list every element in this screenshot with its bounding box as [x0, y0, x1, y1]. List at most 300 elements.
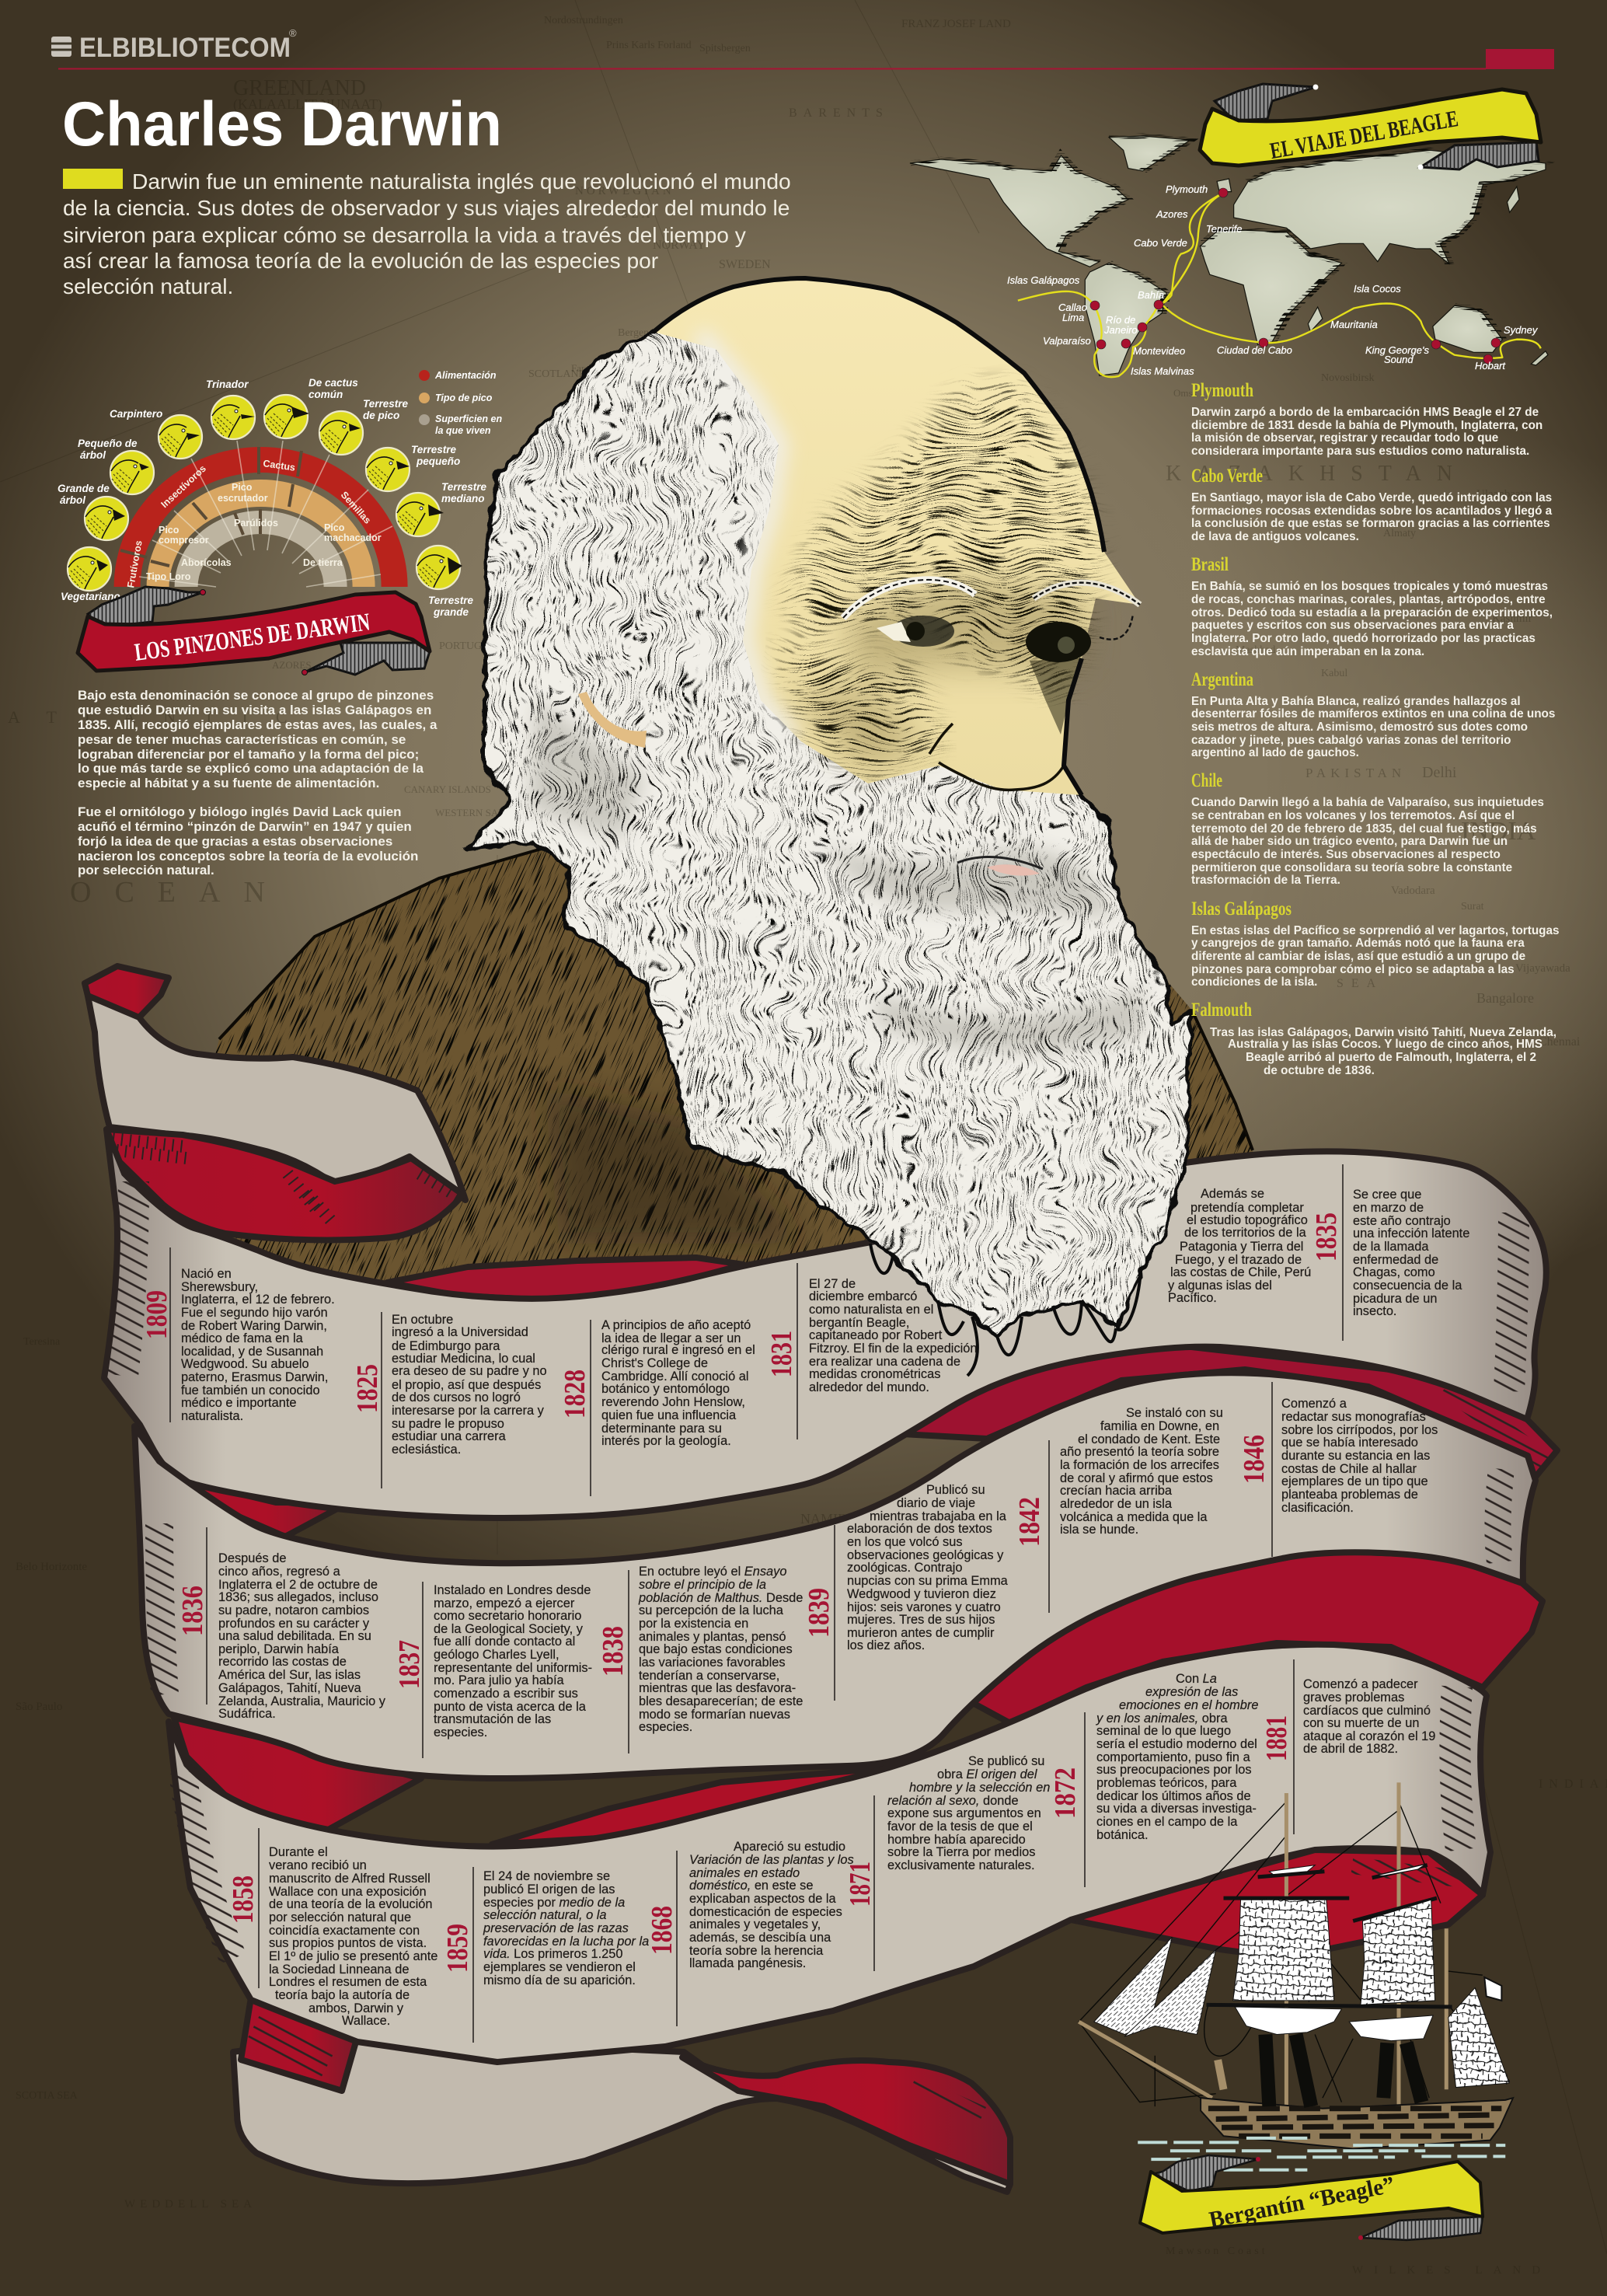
stage: Plymouth	[1191, 380, 1543, 458]
timeline entry 1837: transmutación de las	[434, 1712, 551, 1726]
background: world map sepia texture: SCOTLAND	[528, 368, 587, 380]
timeline entry 1828: botánico y entomólogo	[601, 1382, 730, 1396]
background: world map sepia texture: Chennai	[1539, 1035, 1581, 1049]
timeline entry 1837: de la Geological Society, y	[434, 1622, 584, 1636]
background: world map sepia texture: Omsk	[1173, 387, 1198, 399]
timeline entry 1868: 1868	[646, 1906, 678, 1955]
map place labels: Cabo Verde	[1134, 237, 1187, 249]
background: world map sepia texture: Prins Karls Forland	[606, 40, 692, 51]
timeline entry 1881: graves problemas	[1303, 1691, 1404, 1705]
timeline entry 1836: profundos en su carácter y	[218, 1617, 370, 1631]
chart legend: Superficien en	[435, 413, 502, 424]
timeline entry 1836: Sudáfrica.	[218, 1707, 276, 1721]
text block: Darwin's finches description: Bajo esta denominación se conoce al grupo de pinzones	[78, 688, 434, 703]
timeline entry 1835: este año contrajo	[1353, 1214, 1451, 1228]
timeline entry 1831: Además se	[1201, 1187, 1264, 1201]
background: world map sepia texture: SEA	[622, 208, 653, 221]
timeline entry 1859: publicó El origen de las	[483, 1883, 615, 1896]
timeline entry 1839: los diez años.	[847, 1638, 925, 1652]
background: world map sepia texture: Vadodara	[1391, 885, 1435, 897]
timeline entry 1837: fue allí donde contacto al	[434, 1635, 575, 1649]
timeline entry 1809: Nació en	[181, 1267, 232, 1281]
timeline entry 1838: su percepción de la lucha	[639, 1603, 784, 1617]
timeline entry 1825: el propio, así que después	[392, 1378, 541, 1392]
timeline entry 1872: sus preocupaciones por los	[1096, 1763, 1252, 1777]
timeline entry 1835: 1835	[1310, 1213, 1343, 1261]
timeline entry 1839: Wedgwood y tuvieron diez	[847, 1587, 996, 1601]
timeline entry 1838: modo se formarían nuevas	[639, 1708, 790, 1722]
background: world map sepia texture: (KALAALLIT NUNAAT)	[233, 96, 382, 113]
text block: Darwin's finches description: especie al hábitat y a su fuente de alimentación.	[78, 776, 379, 790]
world map: voyage of the Beagle	[910, 136, 1548, 377]
stage: Cabo Verde: Cabo Verde	[1191, 466, 1263, 487]
timeline entry 1828: determinante para su	[601, 1422, 722, 1436]
map place labels: Callao	[1058, 302, 1087, 313]
timeline entry 1868: explicaban aspectos de la	[689, 1892, 837, 1906]
nose	[929, 724, 1064, 790]
stage: Falmouth: Falmouth	[1191, 1000, 1252, 1021]
background: world map sepia texture: INDIA	[1461, 817, 1536, 846]
stage: Plymouth: considerara importante para sus estudios como naturalista.	[1191, 445, 1529, 458]
banner: bergantín Beagle	[1140, 2155, 1483, 2240]
timeline entry 1831: el estudio topográfico	[1187, 1213, 1308, 1227]
ribbon: band 1	[104, 1129, 1546, 1518]
background: world map sepia texture: Bergen	[618, 327, 649, 339]
banner: bergantín Beagle: Bergantín “Beagle”	[1207, 2172, 1396, 2233]
stage: Brasil: paquetes y escritos con sus observaciones para enviar a	[1191, 619, 1514, 632]
background: world map sepia texture: Faroe Is.	[571, 362, 606, 374]
timeline entry 1868: llamada pangénesis.	[689, 1956, 806, 1970]
background: world map sepia texture: Kashmir	[1492, 612, 1532, 625]
timeline entry 1836: periplo, Darwin había	[218, 1642, 340, 1656]
timeline entry 1859: vida. Los primeros 1.250	[483, 1947, 622, 1961]
finch name labels: Pequeño de	[78, 438, 138, 449]
timeline entry 1842: volcánica a medida que la	[1060, 1510, 1208, 1524]
text block: Darwin's finches description: Fue el ornitólogo y biólogo inglés David Lack quien	[78, 804, 402, 819]
stage: Plymouth: Darwin zarpó a bordo de la embarcación HMS Beagle el 27 de	[1191, 406, 1539, 419]
timeline entry 1839: en los que volcó sus	[847, 1535, 963, 1549]
timeline entry 1831: Fitzroy. El fin de la expedición	[809, 1342, 978, 1356]
stage: Plymouth: la misión de observar, registrar y recaudar todo lo que	[1191, 431, 1498, 445]
ribbon edge engraving	[123, 1181, 1514, 1959]
timeline entry 1831: como naturalista en el	[809, 1303, 933, 1317]
timeline entry 1839: 1839	[803, 1588, 835, 1638]
chart labels: Pico	[159, 525, 180, 536]
timeline entry 1868: domesticación de especies	[689, 1905, 842, 1919]
timeline entry 1835: consecuencia de la	[1353, 1279, 1462, 1293]
timeline entry 1868: teoría sobre la herencia	[689, 1944, 824, 1958]
stage: Argentina: En Punta Alta y Bahía Blanca, realizó grandes hallazgos al	[1191, 695, 1521, 708]
timeline entry 1881: con su muerte de un	[1303, 1716, 1419, 1730]
timeline entry 1871	[844, 1754, 1050, 1971]
stage: Chile: terremoto del 20 de febrero de 1835, del cual fue testigo, más	[1191, 822, 1537, 836]
timeline entry 1837: comenzado a escribir sus	[434, 1687, 578, 1701]
timeline entry 1858: Wallace.	[342, 2014, 390, 2028]
timeline entry 1831: Pacífico.	[1168, 1291, 1217, 1305]
timeline entry 1825: interesarse por la carrera y	[392, 1404, 545, 1418]
timeline entry 1839: hijos: seis varones y cuatro	[847, 1600, 1001, 1614]
timeline entry 1825: En octubre	[392, 1313, 453, 1327]
timeline entry 1831: El 27 de	[809, 1277, 856, 1291]
chart: Darwin's finches	[58, 370, 502, 675]
timeline entry 1868: animales en estado	[689, 1866, 800, 1880]
timeline entry 1809: médico e importante	[181, 1396, 297, 1410]
chart labels: De tierra	[303, 557, 343, 568]
timeline entry 1858: verano recibió un	[269, 1858, 367, 1872]
finch name labels: Carpintero	[110, 408, 162, 420]
stage: Falmouth: de octubre de 1836.	[1264, 1064, 1375, 1077]
text block: Darwin's finches description: forjó la idea de que gracias a estas observaciones	[78, 834, 392, 849]
map place labels: Janeiro	[1103, 324, 1138, 336]
stage: Plymouth: diciembre de 1831 desde la bahía de Plymouth, Inglaterra, con	[1191, 419, 1543, 432]
timeline entry 1871: Se publicó su	[968, 1754, 1044, 1768]
background: world map sepia texture: CANARY ISLANDS	[404, 783, 491, 795]
stage: Chile: Chile	[1191, 770, 1222, 791]
stage: Brasil: esclavista que aún imperaban en la zona.	[1191, 645, 1424, 658]
timeline entry 1868: Apareció su estudio	[734, 1840, 845, 1854]
ribbon: band 2	[134, 1373, 1536, 1778]
background: world map sepia texture: Kabul	[1321, 668, 1347, 679]
timeline entry 1836: Galápagos, Tahití, Nueva	[218, 1681, 362, 1695]
background: world map sepia texture: Vijayawada	[1515, 962, 1570, 975]
text block: Darwin's finches description: acuñó el término “pinzón de Darwin” en 1947 y quien	[78, 819, 412, 834]
timeline entry 1872: sería el estudio moderno del	[1096, 1737, 1257, 1751]
timeline entry 1859: mismo día de su aparición.	[483, 1973, 636, 1987]
timeline entry 1828: A principios de año aceptó	[601, 1318, 751, 1332]
timeline entry 1872: expresión de las	[1145, 1685, 1238, 1699]
timeline entry 1809: de Robert Waring Darwin,	[181, 1319, 327, 1333]
stage: Cabo Verde: de lava de antiguos volcanes.	[1191, 530, 1359, 543]
voyage route	[1018, 193, 1541, 377]
stage: Islas Galápagos: Islas Galápagos	[1191, 899, 1292, 919]
banner: el viaje del beagle	[1200, 84, 1541, 169]
timeline entry 1871: hombre había aparecido	[887, 1833, 1026, 1847]
map place labels: Montevideo	[1133, 345, 1185, 357]
timeline entry 1809: localidad, y de Susannah	[181, 1345, 323, 1359]
map place labels: Bahía	[1138, 289, 1164, 301]
chart: diet arcs, beak type and habitat bands	[114, 447, 408, 587]
timeline entry 1858: de una teoría de la evolución	[269, 1897, 433, 1911]
timeline entry 1837	[393, 1582, 592, 1758]
timeline entry 1858: manuscrito de Alfred Russell	[269, 1872, 431, 1886]
timeline entry 1825: estudiar Medicina, lo cual	[392, 1352, 535, 1366]
background: world map sepia texture: Nordostrundingen	[544, 15, 623, 26]
timeline entry 1836: 1836; sus allegados, incluso	[218, 1590, 378, 1604]
timeline entry 1842: año presentó la teoría sobre	[1060, 1445, 1219, 1459]
timeline entry 1835: en marzo de	[1353, 1201, 1424, 1215]
timeline entry 1809: Inglaterra, el 12 de febrero.	[181, 1293, 335, 1307]
timeline entry 1837: marzo, empezó a ejercer	[434, 1596, 575, 1610]
timeline entry 1868: animales y vegetales y,	[689, 1917, 821, 1931]
timeline entry 1809: Sherewsbury,	[181, 1280, 258, 1294]
background: world map sepia texture: Novosibirsk	[1321, 372, 1374, 384]
timeline entry 1871: exclusivamente naturales.	[887, 1858, 1035, 1872]
timeline entry 1835: de la llamada	[1353, 1240, 1429, 1254]
timeline entry 1859: favorecidas en la lucha por la	[483, 1935, 649, 1949]
map place labels: Hobart	[1475, 360, 1506, 372]
timeline entry 1881: ataque al corazón el 19	[1303, 1729, 1435, 1743]
timeline entry 1846: que se había interesado	[1281, 1436, 1418, 1450]
timeline entry 1828: quien fue una influencia	[601, 1408, 737, 1422]
timeline entry 1858: sus propios puntos de vista.	[269, 1936, 427, 1950]
timeline entry 1831: pretendía completar	[1190, 1201, 1304, 1215]
intro paragraph: selección natural.	[63, 274, 233, 298]
timeline entry 1881: de abril de 1882.	[1303, 1742, 1398, 1756]
map place labels: Ciudad del Cabo	[1217, 344, 1292, 356]
stage: Brasil: Inglaterra. Por otro lado, quedó horrorizado por las practicas	[1191, 632, 1536, 645]
map place labels: Lima	[1062, 312, 1084, 323]
sea waves	[1138, 2138, 1505, 2170]
background: world map sepia texture: PAKISTAN	[1305, 766, 1406, 780]
chart legend	[419, 370, 502, 436]
intro paragraph: de la ciencia. Sus dotes de observador y sus viajes alrededor del mundo le	[63, 195, 790, 220]
route stops	[1090, 188, 1501, 364]
timeline: 1836 to 1846 band	[176, 1382, 1438, 1758]
timeline: 1809 to 1835 band	[141, 1164, 1469, 1496]
timeline entry 1837: representante del uniformis-	[434, 1661, 592, 1675]
timeline entry 1872: Con La	[1176, 1672, 1217, 1686]
timeline entry 1872: 1872	[1049, 1767, 1082, 1819]
timeline entry 1825: 1825	[351, 1364, 384, 1413]
timeline entry 1828	[559, 1318, 755, 1496]
background: world map sepia texture: NORWEGIAN	[575, 185, 675, 197]
background: world map sepia texture: Belo Horizonte	[16, 1561, 87, 1573]
text block: Darwin's finches description: por selección natural.	[78, 863, 214, 878]
timeline entry 1872: y en los animales, obra	[1096, 1712, 1228, 1725]
background: world map sepia texture: Trondheim	[684, 318, 732, 330]
timeline entry 1871: sobre la Tierra por medios	[887, 1845, 1035, 1859]
head outline	[654, 278, 1104, 795]
stage: Argentina: desenterrar fósiles de mamíferos extintos en una colina de unos	[1191, 707, 1555, 721]
timeline entry 1836: una salud debilitada. En su	[218, 1629, 371, 1643]
portrait: hair and beard	[466, 326, 1192, 1376]
stage: Islas Galápagos	[1191, 899, 1560, 989]
map place labels: Tenerife	[1206, 223, 1242, 235]
timeline entry 1846: Comenzó a	[1281, 1397, 1347, 1411]
timeline entry 1828: Cambridge. Allí conoció al	[601, 1370, 749, 1384]
finch name labels: Trinador	[206, 379, 249, 390]
timeline entry 1838: tenderían a conservarse,	[639, 1669, 779, 1683]
background: world map sepia texture: Port Elizabeth	[863, 1686, 925, 1698]
map place labels: King George's	[1365, 344, 1429, 356]
map place labels: Islas Galápagos	[1007, 274, 1080, 286]
background: world map sepia texture: SEA	[1337, 977, 1383, 990]
timeline entry 1842: la formación de los arrecifes	[1060, 1458, 1219, 1472]
timeline entry 1838: por la existencia en	[639, 1617, 748, 1631]
map place labels	[1007, 183, 1539, 377]
timeline entry 1871: 1871	[844, 1862, 877, 1907]
background: world map sepia texture: SWEDEN	[719, 258, 771, 271]
timeline entry 1846: redactar sus monografías	[1281, 1410, 1426, 1424]
finch icons	[68, 395, 462, 591]
timeline entry 1881	[1260, 1659, 1435, 1834]
background: world map sepia texture: Mashhad	[1236, 644, 1275, 656]
text block: Darwin's finches description: lo que más tarde se explicó como una adaptación de la	[78, 761, 424, 776]
background: world map sepia texture: FRANZ JOSEF LAND	[901, 18, 1011, 30]
timeline entry 1842: de coral y afirmó que estos	[1060, 1471, 1213, 1485]
stage: Cabo Verde: En Santiago, mayor isla de Cabo Verde, quedó intrigado con las	[1191, 491, 1552, 504]
timeline entry 1858: ambos, Darwin y	[309, 2001, 404, 2015]
timeline entry 1809: fue también un conocido	[181, 1384, 320, 1397]
timeline entry 1825: ingresó a la Universidad	[392, 1325, 528, 1339]
background: world map sepia texture: São Paulo	[16, 1701, 62, 1713]
timeline entry 1872: emociones en el hombre	[1119, 1698, 1259, 1712]
timeline entry 1858: Londres el resumen de esta	[269, 1975, 427, 1989]
chart labels: Cactus	[263, 458, 296, 473]
timeline entry 1835: Se cree que	[1353, 1188, 1421, 1202]
text block: Darwin's finches description: pesar de tener muchas características en común, se	[78, 732, 406, 747]
timeline entry 1846: costas de Chile al hallar	[1281, 1462, 1417, 1476]
timeline entry 1825: de Edimburgo para	[392, 1339, 500, 1353]
background: world map sepia texture: Ulaanbaatar	[1476, 488, 1532, 501]
timeline entry 1842	[1013, 1406, 1223, 1613]
background: world map sepia texture: KAZAKHSTAN	[1166, 462, 1468, 486]
stage: Argentina: argentino al lado de gauchos.	[1191, 746, 1359, 759]
beard curls	[870, 1244, 1141, 1376]
timeline entry 1838: bles desaparecerían; de este	[639, 1694, 803, 1708]
timeline entry 1831: medidas cronométricas	[809, 1367, 940, 1381]
timeline entry 1828: Christ's College de	[601, 1356, 708, 1370]
map place labels: Azores	[1156, 208, 1188, 220]
chart legend: Tipo de pico	[435, 393, 493, 403]
soft hair to skin edge	[699, 334, 793, 738]
portrait: coat	[216, 849, 1254, 1281]
timeline entry 1868	[646, 1840, 854, 2026]
finch name labels: Terrestre	[411, 444, 457, 455]
finch name labels: grande	[433, 606, 469, 618]
timeline entry 1842: alrededor de un isla	[1060, 1497, 1173, 1511]
timeline entry 1809: Wedgwood. Su abuelo	[181, 1357, 309, 1371]
timeline entry 1837: mo. Para julio ya había	[434, 1673, 565, 1687]
timeline entry 1838	[597, 1565, 803, 1753]
timeline entry 1831: Patagonia y Tierra del	[1180, 1240, 1303, 1254]
stage: Islas Galápagos: y cangrejos de gran tamaño. Además notó que la fauna era	[1191, 937, 1525, 950]
stage: Argentina: Argentina	[1191, 669, 1253, 690]
stage: Chile: trasformación de la Tierra.	[1191, 874, 1340, 887]
background: world map sepia texture: WESTERN SAHARA	[435, 807, 528, 818]
chart legend: Alimentación	[434, 370, 497, 381]
timeline entry 1809: paterno, Erasmus Darwin,	[181, 1370, 328, 1384]
timeline entry 1809: 1809	[141, 1290, 173, 1339]
stage: Argentina: cazador y jinete, pues cabalgó varias zonas del territorio	[1191, 734, 1511, 747]
timeline entry 1842: el condado de Kent. Este	[1078, 1432, 1220, 1446]
timeline entry 1836: 1836	[176, 1586, 209, 1636]
timeline entry 1835: insecto.	[1353, 1304, 1397, 1318]
timeline entry 1831: bergantín Beagle,	[809, 1316, 909, 1330]
finch name labels: árbol	[80, 449, 106, 461]
brows	[843, 580, 975, 618]
background: world map sepia texture: Delhi	[1422, 764, 1457, 781]
timeline entry 1842: isla se hunde.	[1060, 1523, 1138, 1537]
timeline entry 1846: durante su estancia en las	[1281, 1449, 1430, 1463]
portrait: head and face	[654, 278, 1140, 876]
ribbon: bottom tail	[233, 1998, 1010, 2192]
timeline entry 1809: naturalista.	[181, 1409, 243, 1423]
timeline entry 1835: una infección latente	[1353, 1227, 1469, 1240]
timeline entry 1837: 1837	[393, 1640, 426, 1689]
timeline entry 1838: las variaciones favorables	[639, 1656, 786, 1670]
timeline: 1858 to 1881 band	[227, 1659, 1435, 2043]
chart legend: la que viven	[435, 425, 491, 436]
timeline entry 1831: era realizar una cadena de	[809, 1355, 960, 1369]
stage: Islas Galápagos: En estas islas del Pacífico se sorprendió al ver lagartos, tortugas	[1191, 924, 1560, 937]
timeline entry 1871: hombre y la selección en	[909, 1781, 1050, 1795]
illustration: brig Beagle	[1079, 1782, 1513, 2170]
ribbon: top curl	[85, 966, 465, 1240]
chart labels: compresor	[159, 535, 209, 546]
soft face shading	[793, 579, 1088, 769]
timeline entry 1835: Chagas, como	[1353, 1265, 1435, 1279]
chart labels: Tipo Loro	[146, 571, 191, 582]
timeline entry 1837: especies.	[434, 1725, 487, 1739]
timeline entry 1871: expone sus argumentos en	[887, 1806, 1041, 1820]
background: world map sepia texture: Spitsbergen	[699, 43, 751, 54]
stage: Falmouth: Australia y las islas Cocos. Y luego de cinco años, HMS	[1228, 1038, 1543, 1051]
mouth	[957, 857, 1043, 869]
chart labels: Semillas	[339, 490, 373, 526]
timeline entry 1858	[227, 1828, 437, 2028]
banner: los pinzones de Darwin: LOS PINZONES DE DARWIN	[133, 607, 371, 666]
portrait: ear	[578, 692, 647, 748]
timeline entry 1859: El 24 de noviembre se	[483, 1869, 610, 1883]
stage: Chile: allá de haber sido un trágico evento, para Darwin fue un	[1191, 835, 1508, 848]
map place labels: Valparaíso	[1043, 335, 1091, 347]
text block: Darwin's finches description: que estudió Darwin en su visita a las islas Galápagos en	[78, 703, 431, 717]
timeline entry 1871: favor de la tesis de que el	[887, 1820, 1033, 1834]
chart labels: Pico	[324, 522, 345, 533]
timeline entry 1836: Zelanda, Australia, Mauricio y	[218, 1694, 386, 1708]
text block: Darwin's finches description: 1835. Allí, recogió ejemplares de estas aves, las cuales, a	[78, 717, 437, 732]
finch name labels: Terrestre	[428, 595, 474, 606]
map place labels: Plymouth	[1166, 183, 1208, 195]
background: world map sepia texture: SCOTIA SEA	[16, 2090, 78, 2102]
background: world map sepia texture: PORTUGAL	[439, 640, 497, 652]
logo: elbibliote.com: ®	[289, 27, 297, 39]
ship masts and spars	[1079, 1782, 1446, 2106]
stage: Chile: permitieron que consolidara su teoría sobre la constante	[1191, 861, 1512, 874]
finch name labels: de pico	[363, 410, 399, 421]
timeline entry 1871: obra El origen del	[937, 1767, 1037, 1781]
stage: Brasil: de rocas, conchas marinas, corales, plantas, artrópodos, entre	[1191, 593, 1546, 606]
map place labels: Mauritania	[1330, 319, 1378, 330]
background: world map sepia texture: NAMIBIA	[800, 1511, 862, 1527]
stage: Cabo Verde: la conclusión de que estas se formaron gracias a las corrientes	[1191, 517, 1550, 530]
timeline entry 1831: alrededor del mundo.	[809, 1380, 929, 1394]
stage: Brasil: Brasil	[1191, 554, 1229, 575]
timeline entry 1838: especies.	[639, 1720, 692, 1734]
timeline entry 1837: punto de vista acerca de la	[434, 1700, 587, 1714]
background: world map sepia texture: Bangalore	[1476, 990, 1534, 1006]
finch name labels: Grande de	[58, 483, 110, 494]
stage: Chile: espectáculo de interés. Sus observaciones al respecto	[1191, 848, 1501, 861]
stage: Brasil: En Bahía, se sumió en los bosques tropicales y tomó muestras	[1191, 580, 1548, 593]
timeline entry 1828: la idea de llegar a ser un	[601, 1331, 741, 1345]
timeline entry 1831: de los territorios de la	[1184, 1226, 1307, 1240]
timeline entry 1858: la Sociedad Linneana de	[269, 1963, 409, 1977]
timeline entry 1839: diario de viaje	[897, 1496, 975, 1510]
chart labels: Parúlidos	[234, 518, 278, 529]
stage: Falmouth: Tras las islas Galápagos, Darwin visitó Tahití, Nueva Zelanda,	[1210, 1026, 1556, 1039]
finch name labels: Vegetariano	[61, 591, 120, 602]
finch name labels: pequeño	[416, 455, 460, 467]
chart labels: Frutívoros	[125, 539, 145, 589]
background: world map sepia texture: Surat	[1461, 901, 1484, 912]
timeline entry 1859	[441, 1867, 649, 2043]
timeline entry 1881: cardíacos que culminó	[1303, 1704, 1431, 1718]
ship rigging	[1079, 1802, 1509, 2106]
timeline entry 1868: Variación de las plantas y los	[689, 1853, 854, 1867]
timeline entry 1831: capitaneado por Robert	[809, 1328, 943, 1342]
